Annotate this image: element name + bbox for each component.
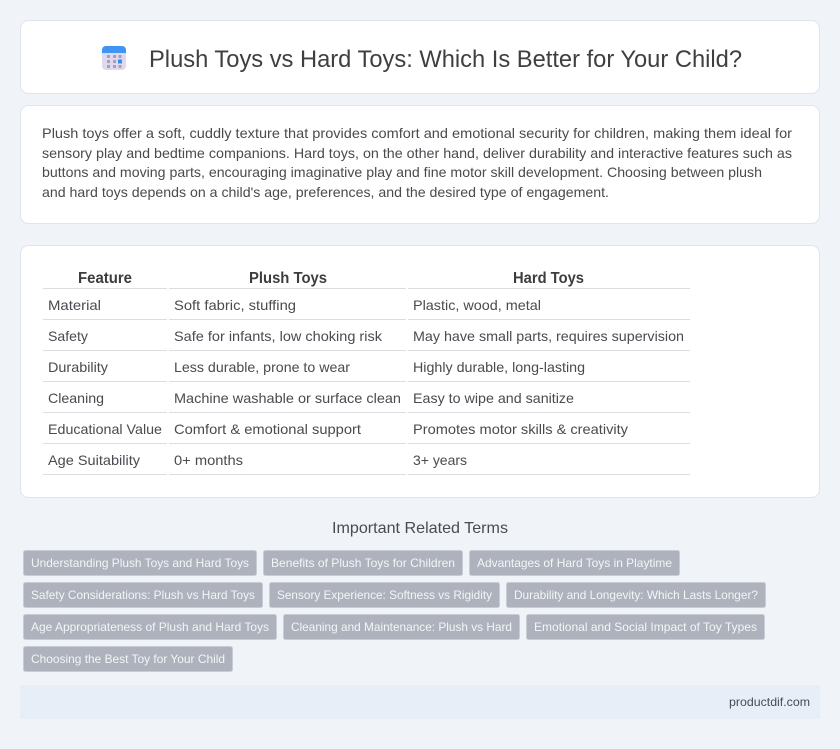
title: Plush Toys vs Hard Toys: Which Is Better for Your Child? <box>149 46 742 73</box>
row: educational value: Educational Value <box>48 421 162 437</box>
related term tags: Choosing the Best Toy for Your Child <box>31 652 225 666</box>
row: age suitability: 0+ months <box>174 452 243 468</box>
panel: comparison table <box>20 246 820 498</box>
row: cleaning: Easy to wipe and sanitize <box>413 390 574 406</box>
related term tags: Age Appropriateness of Plush and Hard Toys <box>31 620 269 634</box>
heading: important related terms: Important Related Terms <box>332 520 508 537</box>
row: material: Plastic, wood, metal <box>413 297 541 313</box>
related term tags: Sensory Experience: Softness vs Rigidity <box>277 588 492 602</box>
table header <box>78 270 584 287</box>
row: durability: Durability <box>48 359 108 375</box>
footer bar <box>20 685 820 719</box>
row: safety: Safety <box>48 328 88 344</box>
related term tags: Advantages of Hard Toys in Playtime <box>477 556 672 570</box>
row: safety: Safe for infants, low choking risk <box>174 328 383 344</box>
footer bar: productdif.com <box>729 695 810 709</box>
row: age suitability <box>48 452 467 468</box>
related term tags: Durability and Longevity: Which Lasts Longer? <box>514 588 758 602</box>
row: educational value: Comfort & emotional support <box>174 421 361 437</box>
icon: calendar <box>102 46 126 70</box>
row: material <box>48 297 541 313</box>
related term tags <box>24 550 766 672</box>
row: safety <box>48 328 684 344</box>
panel: intro paragraph: buttons and moving parts, encouraging imaginative play and fine motor skill development. Choosing between plush <box>42 164 762 180</box>
related term tags: Understanding Plush Toys and Hard Toys <box>31 556 249 570</box>
panel: intro paragraph: sensory play and bedtime companions. Hard toys, on the other hand, deliver durability and interactive features such as <box>42 145 792 161</box>
related term tags: Benefits of Plush Toys for Children <box>271 556 455 570</box>
panel: intro paragraph: and hard toys depends on a child's age, preferences, and the desired type of engagement. <box>42 184 609 200</box>
row: educational value: Promotes motor skills & creativity <box>413 421 628 437</box>
header panel <box>20 20 820 94</box>
row: cleaning <box>48 390 574 406</box>
row: cleaning: Machine washable or surface clean <box>174 390 401 406</box>
table header: Feature <box>78 270 132 287</box>
row: educational value <box>48 421 628 437</box>
related term tags: Safety Considerations: Plush vs Hard Toys <box>31 588 255 602</box>
row: safety: May have small parts, requires supervision <box>413 328 684 344</box>
panel: intro paragraph: Plush toys offer a soft, cuddly texture that provides comfort and emotional security for children, making them ideal for <box>42 125 792 141</box>
panel: intro paragraph <box>20 106 820 224</box>
row: age suitability: Age Suitability <box>48 452 140 468</box>
row: material: Soft fabric, stuffing <box>174 297 296 313</box>
table header: Plush Toys <box>249 270 327 287</box>
row: material: Material <box>48 297 101 313</box>
row: cleaning: Cleaning <box>48 390 104 406</box>
row: durability: Less durable, prone to wear <box>174 359 350 375</box>
row: durability: Highly durable, long-lasting <box>413 359 585 375</box>
table header: Hard Toys <box>513 270 584 287</box>
related term tags: Cleaning and Maintenance: Plush vs Hard <box>291 620 512 634</box>
row: age suitability: 3+ years <box>413 452 467 468</box>
row: durability <box>48 359 585 375</box>
related term tags: Emotional and Social Impact of Toy Types <box>534 620 757 634</box>
